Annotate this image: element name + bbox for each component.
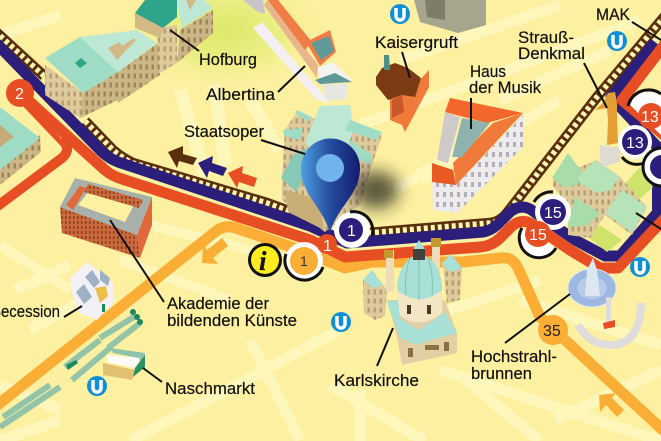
- badge: line 15 red: [519, 221, 556, 258]
- label: Kaisergruft: Kaisergruft: [375, 33, 458, 52]
- route: secondary red line with badge 2: [0, 100, 67, 208]
- label: Karlskirche: [334, 328, 419, 390]
- label: Akademie der bildenden Künste: [110, 220, 297, 330]
- building: St. Stephan base: [414, 0, 486, 33]
- badge: line 13 blue: [618, 125, 652, 164]
- badge: partial blue at edge: [643, 148, 661, 186]
- building: Karlskirche: [363, 238, 462, 365]
- building: Kapuzinerkirche / Kaisergruft: [376, 55, 429, 132]
- label: MAK: [596, 5, 661, 40]
- label: Kaisergruft: [375, 33, 458, 78]
- label: Strauß-Denkmal: Denkmal: [518, 44, 585, 63]
- route: railway track: [0, 16, 661, 233]
- badge: line 1 yellow: [285, 242, 323, 280]
- label: Hochstrahlbrunnen: [471, 294, 570, 383]
- icon: U-Bahn stations: [87, 4, 650, 396]
- icon: information: i: [259, 246, 267, 276]
- badge: line 15 red: 15: [529, 227, 547, 244]
- badge: line 1 yellow: 1: [300, 253, 308, 269]
- label: Staatsoper: Staatsoper: [184, 122, 264, 141]
- building: fountain Hochstrahlbrunnen: [568, 258, 641, 345]
- building: left block: [0, 107, 41, 185]
- label: Akademie der bildenden Künste: Akademie der: [167, 294, 269, 313]
- building: Hofburg: [45, 0, 213, 118]
- label: MAK: MAK: [596, 5, 631, 24]
- building: Haus der Musik: [432, 98, 523, 213]
- badge: line 2: [6, 79, 34, 107]
- building: Stadtpark pavilion: [552, 153, 653, 252]
- badge: line 1 blue: [334, 212, 373, 248]
- badge: line 13 blue: 13: [626, 135, 644, 152]
- badge: line 35: 35: [543, 323, 561, 340]
- pin shadow: [353, 171, 399, 209]
- badge: line 1 red: 1: [323, 238, 332, 255]
- label: Hochstrahlbrunnen: brunnen: [471, 364, 532, 383]
- leader: park building: [636, 213, 661, 229]
- badge: line 35: [538, 315, 568, 345]
- badge: line 1 blue: 1: [347, 223, 356, 240]
- building: Staatsoper: [281, 105, 382, 232]
- badge: line 15 blue: [534, 192, 571, 230]
- badge: line 13 red: [628, 90, 661, 135]
- label: Naschmarkt: [143, 368, 255, 398]
- label: Hofburg: [170, 30, 257, 69]
- label: Akademie der bildenden Künste: bildenden Künste: [167, 311, 297, 330]
- building: Akademie der bildenden Künste: [60, 178, 152, 258]
- label: Haus der Musik: Haus: [470, 62, 506, 81]
- label: Hofburg: Hofburg: [199, 50, 257, 69]
- building: Albertina: [243, 0, 352, 103]
- route: red line: [20, 40, 661, 268]
- label: Karlskirche: Karlskirche: [334, 371, 419, 390]
- icon: information: [248, 243, 282, 277]
- badge: line 15 blue: 15: [544, 205, 562, 222]
- label: Albertina: Albertina: [206, 85, 276, 104]
- label: Haus der Musik: [469, 62, 541, 129]
- badge: line 1 red: [317, 234, 337, 255]
- building: Secession: [70, 262, 113, 320]
- route: orange-yellow line: [0, 227, 661, 432]
- label: Hochstrahlbrunnen: Hochstrahl-: [471, 347, 557, 366]
- label: Naschmarkt: Naschmarkt: [165, 379, 255, 398]
- statue: Strauß-Denkmal: [595, 92, 620, 167]
- location pin: [301, 138, 360, 233]
- Naschmarkt stalls: [0, 309, 145, 427]
- label: Staatsoper: [184, 122, 305, 154]
- label: Strauß-Denkmal: [518, 28, 607, 108]
- badge: line 2: 2: [15, 86, 24, 103]
- badge: line 13 red: 13: [641, 109, 659, 126]
- label: Albertina: [206, 66, 305, 104]
- route: blue line: [0, 42, 661, 256]
- label: Haus der Musik: der Musik: [469, 78, 541, 97]
- label: Strauß-Denkmal: Strauß-: [518, 28, 574, 47]
- direction arrows: [168, 146, 624, 417]
